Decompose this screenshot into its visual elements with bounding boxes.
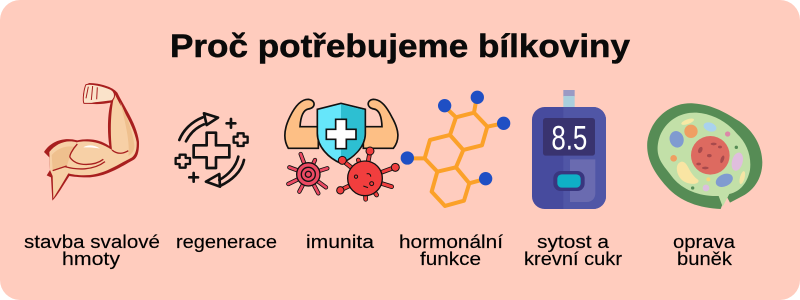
label: sytost a krevní cukr: sytost a (537, 232, 610, 252)
label: oprava buněk: buněk (677, 249, 733, 269)
virus red (341, 152, 395, 199)
shield (317, 103, 365, 163)
label: stavba svalové hmoty: stavba svalové (24, 232, 160, 252)
icon: regeneration cross with arrows (176, 113, 248, 187)
label: hormonální funkce: funkce (420, 249, 481, 269)
virus pink (288, 154, 327, 193)
label: stavba svalové hmoty (24, 232, 160, 269)
label: sytost a krevní cukr: krevní cukr (524, 249, 622, 269)
left arm (285, 99, 318, 148)
icon: hormone molecule (401, 91, 510, 206)
title: Proč potřebujeme bílkoviny (170, 28, 630, 64)
plus (326, 119, 356, 149)
icon: immunity shield, arms and viruses (285, 99, 399, 199)
label: sytost a krevní cukr (524, 232, 622, 269)
label: oprava buněk (673, 232, 736, 269)
label: hormonální funkce (399, 232, 503, 269)
icon: glucose meter (532, 90, 606, 209)
label: regenerace: regenerace (176, 232, 277, 252)
right arm (363, 99, 398, 148)
icon: flexed muscular arm (44, 83, 139, 201)
label: stavba svalové hmoty: hmoty (62, 249, 120, 269)
meter reading: 8.5 (551, 119, 587, 157)
icon: cell (647, 103, 762, 209)
label: imunita: imunita (306, 232, 375, 252)
label: oprava buněk: oprava (673, 232, 736, 252)
label: hormonální funkce: hormonální (399, 232, 503, 252)
